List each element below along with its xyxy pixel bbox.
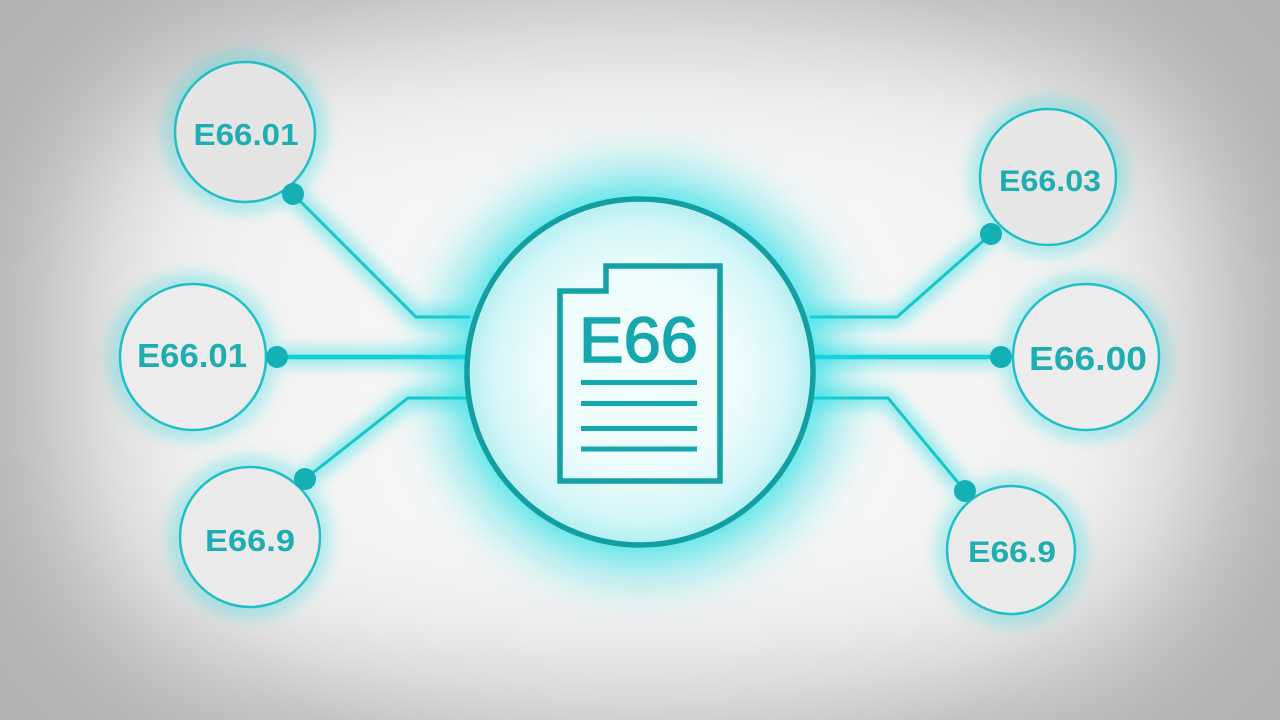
central hub glow [448, 180, 832, 564]
connector: E66.01 middle [277, 355, 470, 359]
node: E66.01 middle left: E66.01 [137, 337, 247, 374]
node: E66.9 lower right [946, 480, 1076, 615]
central hub circle [467, 199, 813, 545]
document text lines [581, 382, 697, 449]
connector: E66.00 [810, 355, 1001, 359]
icon: E66 document [560, 266, 720, 481]
node: E66.03 upper right: E66.03 [999, 165, 1101, 198]
node: E66.01 upper left: E66.01 [194, 117, 298, 152]
connector lines [277, 194, 1001, 491]
node: E66.9 lower right: E66.9 [968, 536, 1056, 569]
connector: E66.01 upper [293, 194, 470, 317]
node: E66.9 lower left [179, 466, 321, 608]
node: E66.00 middle right [990, 283, 1160, 431]
node: E66.03 upper right [979, 108, 1117, 246]
node: E66.9 lower left: E66.9 [205, 523, 295, 558]
connector: E66.9 lower right [810, 398, 965, 491]
document code label: E66 [579, 304, 698, 376]
connector: E66.03 [810, 234, 991, 317]
node: E66.01 middle left [119, 283, 288, 431]
node: E66.00 middle right: E66.00 [1029, 340, 1147, 377]
node: E66.01 upper left [174, 61, 316, 205]
connector: E66.9 lower left [305, 398, 470, 479]
